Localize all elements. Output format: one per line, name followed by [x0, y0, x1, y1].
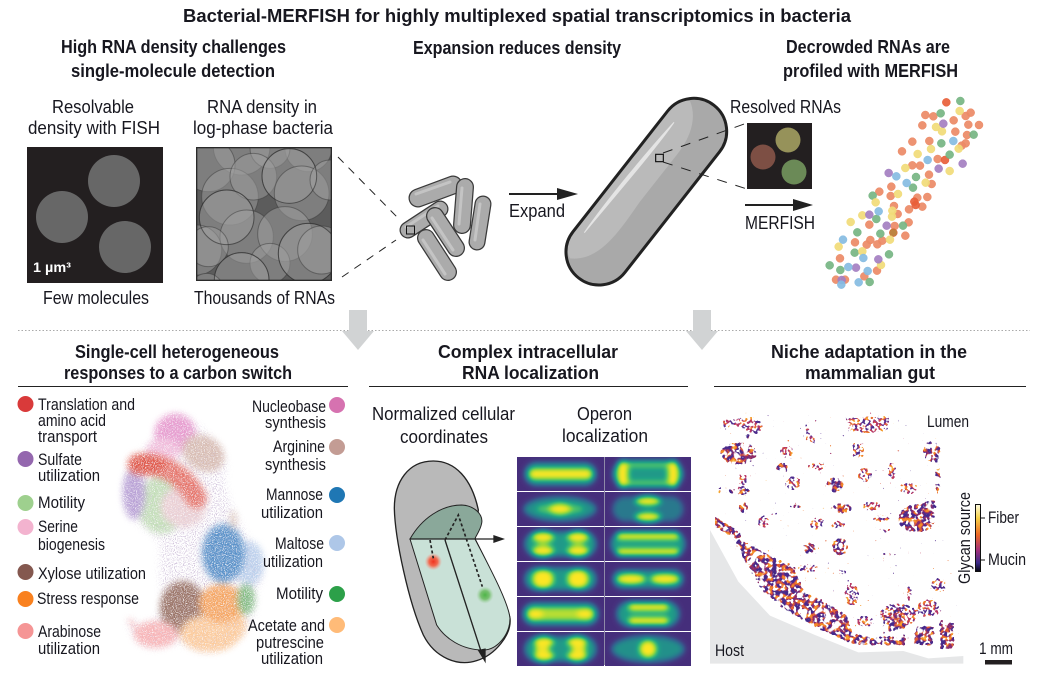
arrow: MERFISH: MERFISH — [745, 212, 815, 233]
panel: resolved RNAs square — [747, 123, 812, 189]
legend item: sulfate — [18, 451, 100, 485]
heading: single-cell: responses to a carbon switch — [64, 363, 292, 383]
legend item: arginine — [265, 438, 345, 474]
legend item: maltose — [263, 535, 345, 571]
chart: sparse bacteria scatter — [717, 414, 948, 628]
spot: green RNA — [476, 586, 494, 604]
heatmap r2 right — [605, 492, 691, 526]
heading: decrowded RNAs: profiled with MERFISH — [783, 61, 958, 81]
chart: dense bacteria clusters — [715, 430, 955, 650]
heatmap r6 right — [605, 632, 691, 666]
label: resolvable density: Resolvable — [52, 96, 134, 117]
legend item: acetate: Acetate and — [248, 617, 325, 635]
legend: right column — [248, 397, 345, 668]
legend item: nucleobase — [252, 397, 345, 432]
chart: isolated bacteria background — [720, 412, 960, 650]
legend item: arabinose: utilization — [38, 640, 100, 658]
arrow: down left — [342, 310, 374, 350]
heatmap r1 left — [517, 457, 604, 491]
legend item: mannose: Mannose — [266, 486, 323, 504]
arrow: MERFISH — [745, 199, 815, 233]
label: normalized coordinates — [372, 403, 515, 447]
legend: glycan source colorbar — [956, 492, 1026, 584]
heading: decrowded RNAs — [783, 37, 958, 81]
legend item: translation: transport — [38, 428, 97, 446]
legend item: stress: Stress response — [37, 590, 139, 608]
scale bar: 1 mm — [979, 640, 1013, 658]
heading: niche — [714, 342, 1026, 387]
label: operon localization: Operon — [577, 403, 632, 424]
legend item: acetate: putrescine — [256, 634, 324, 652]
legend item: nucleobase: Nucleobase — [252, 398, 326, 416]
legend item: translation: amino acid — [38, 412, 106, 430]
spot: red RNA — [425, 553, 442, 570]
legend item: motility: Motility — [276, 585, 324, 603]
legend: left column — [18, 396, 146, 658]
scale bar — [979, 640, 1013, 664]
label: resolved RNAs: Resolved RNAs — [730, 96, 841, 117]
heading: single-cell: Single-cell heterogeneous — [75, 342, 279, 362]
icon: expanded bacterium — [566, 98, 727, 285]
legend item: serine — [18, 518, 105, 554]
legend item: arginine: Arginine — [273, 438, 325, 456]
legend item: mannose: utilization — [261, 504, 323, 522]
heading: niche: mammalian gut — [805, 363, 935, 383]
legend item: xylose: Xylose utilization — [38, 565, 146, 583]
heading: niche: Niche adaptation in the — [771, 342, 967, 362]
legend item: sulfate: Sulfate — [38, 451, 82, 469]
title: Bacterial-MERFISH for highly multiplexed spatial transcriptomics in bacteria — [183, 6, 852, 26]
panel: dense RNA square — [196, 147, 332, 281]
heading: expansion: Expansion reduces density — [413, 38, 621, 58]
legend: glycan source colorbar: Mucin — [988, 551, 1026, 569]
label: RNA density — [193, 96, 334, 138]
chart: operon heatmaps — [497, 437, 712, 673]
arrow: expand — [509, 188, 578, 221]
heatmap r4 left — [517, 562, 604, 596]
legend item: serine: biogenesis — [38, 536, 105, 554]
heatmap r3 left — [517, 527, 604, 561]
zoom guide lines right — [663, 123, 747, 189]
legend item: nucleobase: synthesis — [265, 414, 326, 432]
icon: normalized cell diagram — [394, 461, 510, 663]
legend item: serine: Serine — [38, 518, 78, 536]
legend item: acetate — [248, 617, 345, 668]
panel: few molecules square — [27, 147, 163, 283]
heatmap r3 right — [605, 527, 691, 561]
heading: single-cell — [18, 342, 348, 387]
label: normalized coordinates: Normalized cellular — [372, 403, 515, 424]
heatmap r5 right — [605, 597, 691, 631]
caption: thousands of RNAs: Thousands of RNAs — [194, 287, 335, 308]
umap colored clusters — [123, 413, 264, 652]
heading: localization: Complex intracellular — [438, 342, 618, 362]
arrow: expand: Expand — [509, 200, 565, 221]
legend item: translation — [18, 396, 135, 446]
label: resolvable density — [28, 96, 160, 138]
arrow: down right — [686, 310, 718, 350]
legend item: motility: Motility — [38, 494, 86, 512]
heading: decrowded RNAs: Decrowded RNAs are — [786, 37, 950, 57]
legend: glycan source colorbar: Glycan source — [956, 492, 974, 584]
label: normalized coordinates: coordinates — [400, 426, 488, 447]
zoom guide lines left — [338, 157, 398, 277]
label: lumen: Lumen — [927, 413, 969, 431]
legend item: translation: Translation and — [38, 396, 135, 414]
panel: host tissue area — [710, 530, 963, 664]
heading: localization: RNA localization — [462, 363, 599, 383]
legend item: acetate: utilization — [261, 650, 323, 668]
label: resolvable density: density with FISH — [28, 117, 160, 138]
legend item: sulfate: utilization — [38, 467, 100, 485]
caption: few molecules: Few molecules — [43, 287, 149, 308]
legend item: arginine: synthesis — [265, 456, 326, 474]
heading: high RNA density: High RNA density challenges — [61, 37, 286, 57]
label: RNA density: RNA density in — [207, 96, 317, 117]
chart: UMAP clusters — [123, 413, 264, 652]
legend item: arabinose: Arabinose — [38, 623, 101, 641]
heading: high RNA density: single-molecule detection — [71, 61, 275, 81]
legend item: mannose — [261, 486, 345, 522]
panel: few molecules square: 1 µm³ — [33, 259, 71, 275]
heatmap r1 right — [605, 457, 691, 491]
heading: high RNA density — [61, 37, 286, 81]
heatmap r5 left — [517, 597, 604, 631]
label: operon localization — [562, 403, 648, 446]
legend item: maltose: Maltose — [275, 535, 324, 553]
heatmap r2 left — [517, 492, 604, 526]
label: operon localization: localization — [562, 425, 648, 446]
label: RNA density: log-phase bacteria — [193, 117, 334, 138]
legend item: arabinose — [18, 623, 101, 658]
icon: bacteria cluster — [406, 182, 483, 274]
label: host: Host — [715, 642, 744, 660]
legend: glycan source colorbar: Fiber — [988, 509, 1019, 527]
umap background scatter — [125, 414, 261, 652]
heatmap r6 left — [517, 632, 604, 666]
legend item: motility — [18, 494, 86, 512]
legend item: maltose: utilization — [263, 553, 323, 571]
chart: MERFISH RNA spots in cell — [826, 97, 983, 289]
heading: localization — [369, 342, 688, 387]
heatmap r4 right — [605, 562, 691, 596]
